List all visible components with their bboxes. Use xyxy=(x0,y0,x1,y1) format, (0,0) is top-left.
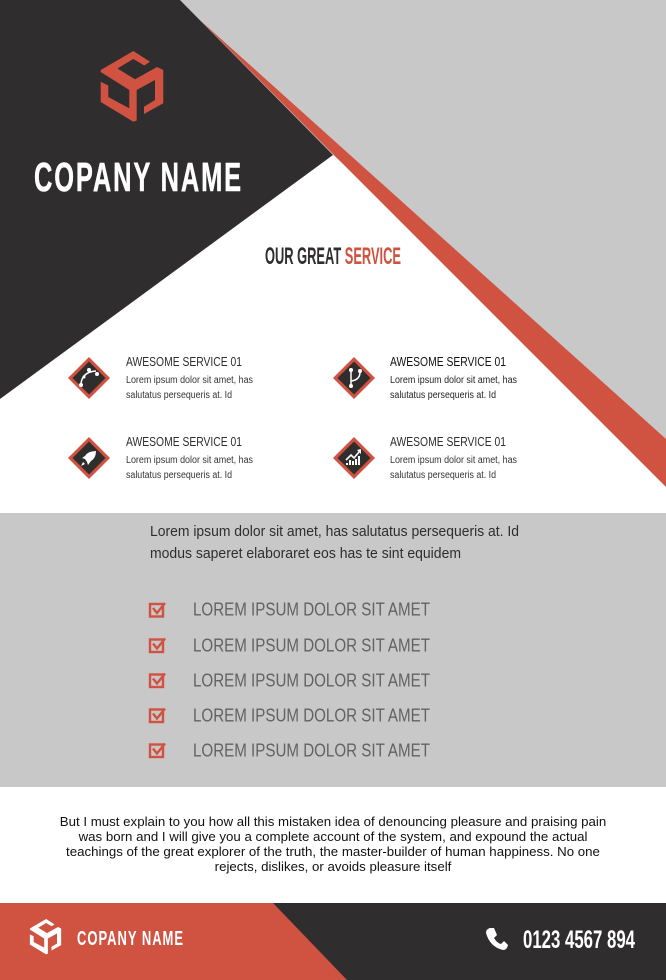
icon: phone xyxy=(486,928,508,950)
intro paragraph: Lorem ipsum dolor sit amet, has salutatus persequeris at. Id xyxy=(150,523,519,540)
icon: growth chart xyxy=(333,437,375,479)
service item 1 xyxy=(68,354,253,401)
checklist xyxy=(150,600,430,760)
service text 1: Lorem ipsum dolor sit amet, has xyxy=(126,375,253,386)
panel: top grey area xyxy=(180,0,666,445)
footer dark bar xyxy=(0,903,666,980)
service text 2 xyxy=(390,354,517,401)
icon: company logo xyxy=(101,51,163,122)
body text block xyxy=(60,814,606,874)
service text 1: salutatus persequeris at. Id xyxy=(126,390,232,401)
list item 5: LOREM IPSUM DOLOR SIT AMET xyxy=(193,740,430,760)
icon: vector curve xyxy=(68,357,110,399)
service item 2 xyxy=(333,354,517,401)
body text block: was born and I will give you a complete account of the system, and expound the actual xyxy=(78,829,587,844)
service item 4 xyxy=(333,434,517,481)
footer red panel xyxy=(0,903,347,980)
service text 4: AWESOME SERVICE 01 xyxy=(390,434,506,449)
service item 3 xyxy=(68,434,253,481)
service text 3 xyxy=(126,434,253,481)
service text 3: salutatus persequeris at. Id xyxy=(126,470,232,481)
panel: dark corner xyxy=(0,0,333,399)
list item 4: LOREM IPSUM DOLOR SIT AMET xyxy=(193,706,430,726)
list item 1: LOREM IPSUM DOLOR SIT AMET xyxy=(193,600,430,620)
service text 4: salutatus persequeris at. Id xyxy=(390,470,496,481)
intro paragraph xyxy=(150,523,519,562)
service text 4: Lorem ipsum dolor sit amet, has xyxy=(390,455,517,466)
panel: grey middle band xyxy=(0,513,666,787)
service text 3: AWESOME SERVICE 01 xyxy=(126,434,242,449)
list item 3: LOREM IPSUM DOLOR SIT AMET xyxy=(193,670,430,690)
heading: our great service: OUR GREAT SERVICE xyxy=(265,243,401,270)
body text block: But I must explain to you how all this mistaken idea of denouncing pleasure and praising pain xyxy=(60,814,606,829)
service text 2: Lorem ipsum dolor sit amet, has xyxy=(390,375,517,386)
intro paragraph: modus saperet elaboraret eos has te sint equidem xyxy=(150,545,461,562)
service text 4 xyxy=(390,434,517,481)
icon: footer logo xyxy=(30,919,61,954)
body text block: teachings of the great explorer of the truth, the master-builder of human happiness. No one xyxy=(66,844,600,859)
icon: rocket xyxy=(68,437,110,479)
body text block: rejects, dislikes, or avoids pleasure itself xyxy=(215,859,452,874)
title: company name: COPANY NAME xyxy=(34,154,243,200)
service text 2: salutatus persequeris at. Id xyxy=(390,390,496,401)
service text 1: AWESOME SERVICE 01 xyxy=(126,354,242,369)
footer company name: COPANY NAME xyxy=(77,928,184,950)
list item 2: LOREM IPSUM DOLOR SIT AMET xyxy=(193,636,430,656)
service text 2: AWESOME SERVICE 01 xyxy=(390,354,506,369)
icon: git branch xyxy=(333,357,375,399)
service text 3: Lorem ipsum dolor sit amet, has xyxy=(126,455,253,466)
service text 1 xyxy=(126,354,253,401)
red diagonal band xyxy=(201,21,666,487)
